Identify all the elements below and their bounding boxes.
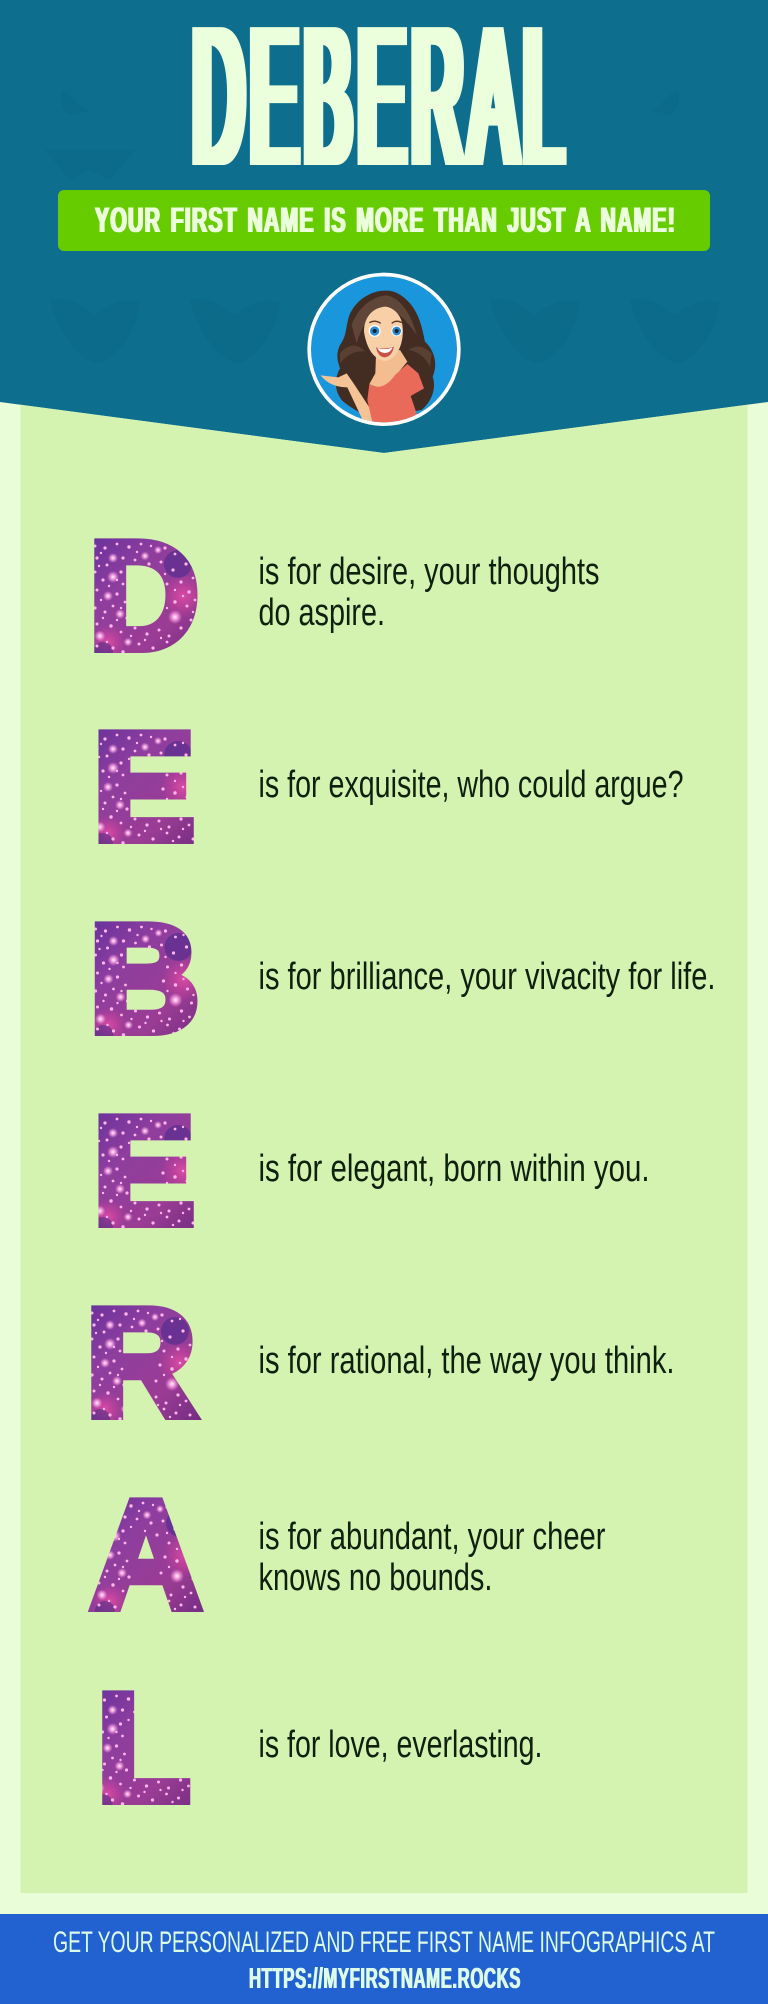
row E second	[93, 1086, 650, 1256]
header background with chevron	[0, 0, 768, 453]
letter E: E	[93, 702, 195, 872]
row D	[89, 511, 600, 681]
row R	[86, 1278, 674, 1448]
letter D: D	[89, 511, 199, 681]
arm and hand	[321, 373, 373, 423]
letter R: R	[86, 1278, 196, 1448]
row B	[90, 894, 716, 1064]
letter B: B	[90, 894, 199, 1064]
avatar portrait	[307, 273, 461, 427]
text: knows no bounds.	[258, 1557, 492, 1599]
footer	[0, 1914, 768, 2004]
text: is for elegant, born within you.	[258, 1148, 650, 1190]
smile	[376, 347, 394, 357]
letter E: E	[93, 1086, 195, 1256]
row E	[93, 702, 684, 872]
text: is for abundant, your cheer	[258, 1516, 606, 1558]
shirt	[367, 364, 424, 427]
eyebrows	[369, 321, 402, 323]
content panel	[20, 405, 748, 1893]
eyes	[369, 325, 381, 337]
letter A: A	[91, 1470, 201, 1640]
row L	[97, 1663, 542, 1833]
row A	[91, 1470, 606, 1640]
letter L: L	[97, 1663, 190, 1833]
text: do aspire.	[258, 592, 385, 634]
subtitle banner	[58, 190, 710, 251]
footer url: HTTPS://MYFIRSTNAME.ROCKS	[249, 1963, 521, 1995]
hair	[336, 291, 435, 418]
face	[364, 307, 403, 361]
faint butterfly pattern	[45, 90, 720, 363]
neck	[369, 350, 407, 387]
text: is for desire, your thoughts	[258, 551, 600, 593]
text: is for love, everlasting.	[258, 1724, 542, 1766]
